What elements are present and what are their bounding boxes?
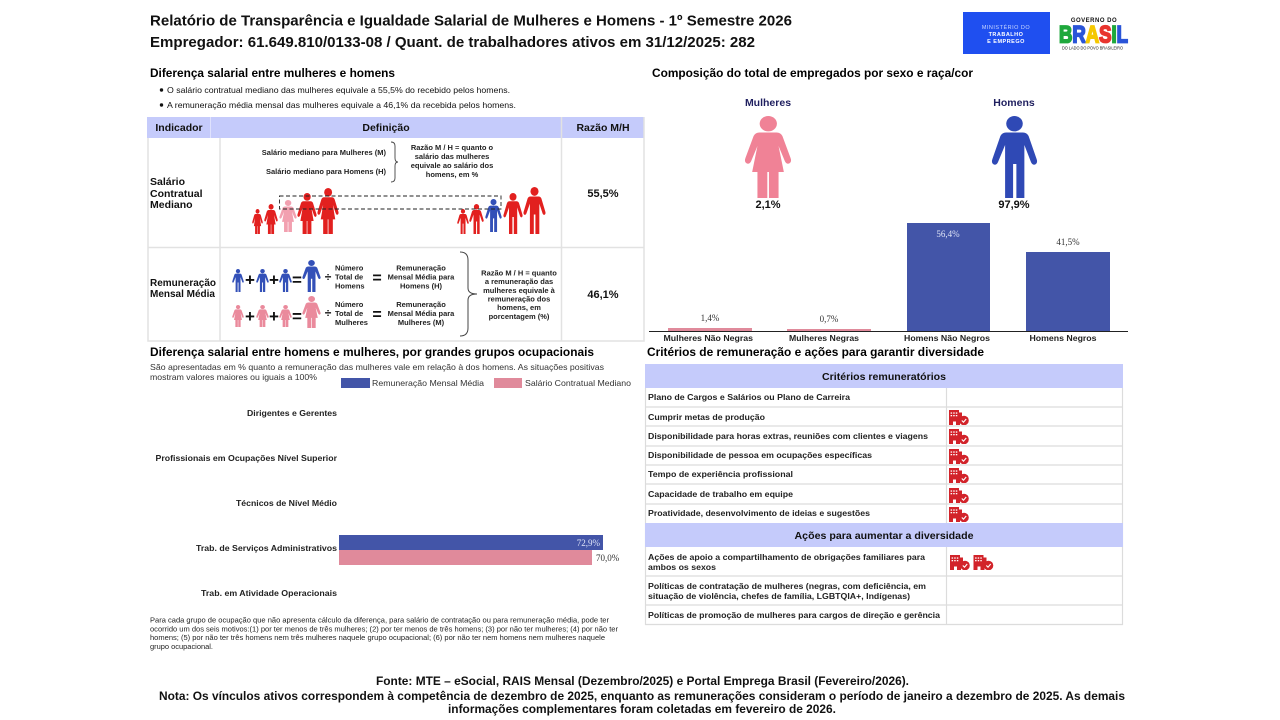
bar chart: sexo e raça/cor: Homens Negros (1030, 333, 1097, 343)
bar chart: sexo e raça/cor: 56,4% (936, 229, 960, 239)
bar chart: sexo e raça/cor: Homens Não Negros (904, 333, 990, 343)
table header: Indicador (155, 122, 203, 134)
definition text: remuneração média: a remuneração das (485, 277, 553, 286)
header: critérios remuneratórios: Critérios remuneratórios (822, 371, 946, 383)
bar chart: grupos ocupacionais: Profissionais em Ocupações Nível Superior (156, 453, 338, 463)
formula: women: = (372, 306, 382, 324)
bar chart: grupos ocupacionais: 72,9% (577, 538, 600, 548)
formula: women: Total de (335, 309, 363, 318)
chart description: mostram valores maiores ou iguais a 100% (150, 372, 317, 382)
bar chart: sexo e raça/cor: 1,4% (701, 313, 720, 323)
formula: women (232, 296, 455, 328)
figure: homens 97,9%: 97,9% (998, 199, 1030, 211)
formula: women: Mulheres (335, 318, 368, 327)
formula: women: Remuneração (396, 300, 446, 309)
formula: women: Mulheres (M) (398, 318, 445, 327)
formula: men: + (269, 270, 279, 290)
criteria rows (648, 393, 929, 518)
row label: Salário Contratual Mediano: Salário (150, 176, 185, 188)
formula: women: ÷ (325, 306, 332, 320)
panel: indicator table (147, 117, 644, 341)
figure: mulheres 2,1%: 2,1% (755, 199, 781, 211)
bar chart: sexo e raça/cor: 0,7% (820, 314, 839, 324)
action rows (648, 553, 941, 620)
bar chart: sexo e raça/cor: Mulheres Negras (789, 333, 859, 343)
row label: Remuneração Mensal Média: Remuneração (150, 277, 216, 289)
formula: women: Mensal Média para (388, 309, 455, 318)
formula: women: + (269, 307, 279, 326)
bar chart: grupos ocupacionais: 70,0% (596, 553, 620, 563)
table header: Razão M/H (576, 122, 630, 134)
action rows: Ações de apoio a compartilhamento de obrigações familiares para (648, 553, 926, 562)
header: ações para aumentar a diversidade (645, 523, 1123, 547)
page title: Empregador: 61.649.810/0133-08 / Quant. de trabalhadores ativos em 31/12/2025: 282 (150, 34, 755, 51)
row label: Salário Contratual Mediano: Mediano (150, 199, 193, 211)
definition text: salário mediano: salário das mulheres (415, 152, 489, 161)
formula: men: + (245, 270, 255, 290)
formula: men: Homens (335, 282, 365, 290)
definition text: salário mediano (262, 142, 494, 182)
page title: Relatório de Transparência e Igualdade Salarial de Mulheres e Homens - 1º Semestre 2026 (150, 12, 792, 30)
definition text: remuneração média: Razão M / H = quanto (481, 268, 557, 278)
row label: Salário Contratual Mediano: Contratual (150, 188, 203, 200)
bar chart: grupos ocupacionais (156, 408, 620, 598)
footer: source and note: Nota: Os vínculos ativos correspondem à competência de dezembro de 2025, enquanto as remunerações consideram o período de janeiro a dezembro de 2025. As demais (159, 691, 1125, 703)
formula: women: Número (335, 300, 364, 309)
header: ações para aumentar a diversidade: Ações para aumentar a diversidade (794, 530, 974, 542)
criteria rows: Tempo de experiência profissional (648, 470, 793, 479)
summary bullets (160, 85, 516, 110)
value: 55,5%: 55,5% (587, 188, 619, 200)
formula: men: = (292, 270, 302, 290)
heading: composição: Composição do total de empregados por sexo e raça/cor (652, 66, 973, 80)
definition text: remuneração média: mulheres equivale à (483, 286, 556, 295)
criteria rows: Cumprir metas de produção (648, 413, 765, 422)
footnote: homens; (5) por não ter três homens nem três mulheres naquele grupo ocupacional; (6) por não ter nem homens nem mulheres naquele (150, 635, 605, 642)
table header: Definição (362, 122, 410, 134)
bar chart: grupos ocupacionais: Trab. em Atividade Operacionais (201, 588, 337, 598)
definition text: remuneração média (460, 252, 557, 336)
chart description: São apresentadas em % quanto a remuneração das mulheres vale em relação à dos homens. As situações positivas (150, 362, 604, 372)
action rows: situação de violência, chefes de família, LGBTQIA+, Indígenas) (648, 592, 910, 601)
formula: men: Mensal Média para (388, 272, 455, 282)
bar chart: sexo e raça/cor: Mulheres Não Negras (664, 333, 753, 343)
panel: criteria table (645, 364, 1123, 624)
logo: Ministério do Trabalho e Emprego: TRABALHO (989, 32, 1024, 38)
definition text: salário mediano: homens, em % (426, 170, 479, 179)
definition text: remuneração média: homens, em (497, 303, 541, 312)
formula: men: Total de (335, 272, 363, 282)
chart legend: Salário Contratual Mediano (525, 378, 631, 388)
definition text: salário mediano: Salário mediano para Homens (H) (266, 167, 387, 176)
bar chart: grupos ocupacionais: Trab. de Serviços Administrativos (196, 543, 337, 553)
action rows: Políticas de promoção de mulheres para cargos de direção e gerência (648, 611, 941, 620)
action rows: Políticas de contratação de mulheres (negras, com deficiência, em (648, 582, 926, 591)
summary bullets: O salário contratual mediano das mulheres equivale a 55,5% do recebido pelos homens. (167, 85, 510, 95)
formula: men (232, 260, 455, 292)
logo: Governo do Brasil: DO LADO DO POVO BRASILEIRO (1062, 46, 1123, 50)
icons: criteria checked (949, 410, 969, 522)
logo: Ministério do Trabalho e Emprego: MINISTÉRIO DO (982, 24, 1030, 31)
definition text: salário mediano: equivale ao salário dos (411, 161, 493, 170)
logo: Ministério do Trabalho e Emprego (963, 12, 1050, 54)
formula: women: = (292, 307, 302, 326)
header: critérios remuneratórios (645, 364, 1123, 388)
formula: women: + (245, 307, 255, 326)
row label: Remuneração Mensal Média: Mensal Média (150, 288, 215, 300)
criteria rows: Disponibilidade de pessoa em ocupações específicas (648, 451, 873, 460)
formula: men: Remuneração (396, 264, 446, 272)
footnote: grupo ocupacional. (150, 644, 213, 651)
heading: diferença salarial: Diferença salarial entre mulheres e homens (150, 66, 395, 80)
bar chart: grupos ocupacionais: Dirigentes e Gerentes (247, 408, 337, 418)
illustration: median women (252, 188, 339, 234)
figure: homens 97,9% (992, 97, 1037, 211)
footnote: ocorrido um dos seis motivos:(1) por ter menos de três mulheres; (2) por ter menos de três homens; (3) por não ter mulheres; (4) por não ter (150, 626, 619, 634)
criteria rows: Disponibilidade para horas extras, reuniões com clientes e viagens (648, 432, 929, 441)
definition text: salário mediano: Salário mediano para Mulheres (M) (262, 148, 386, 157)
figure: homens 97,9%: Homens (993, 97, 1035, 109)
criteria rows: Proatividade, desenvolvimento de ideias e sugestões (648, 509, 871, 518)
formula: men: = (372, 270, 382, 287)
page title (150, 12, 792, 51)
figure: mulheres 2,1% (745, 97, 791, 211)
row label: Remuneração Mensal Média (150, 277, 216, 300)
illustration: median men (457, 187, 546, 234)
chart legend (341, 378, 631, 388)
criteria rows: Capacidade de trabalho em equipe (648, 490, 794, 499)
logo: Governo do Brasil: GOVERNO DO (1071, 18, 1117, 24)
logo: Governo do Brasil (1050, 12, 1136, 54)
action rows: ambos os sexos (648, 563, 717, 572)
table header (147, 117, 644, 138)
summary bullets: A remuneração média mensal das mulheres equivale a 46,1% da recebida pelos homens. (167, 100, 516, 110)
formula: men: ÷ (325, 270, 332, 284)
formula: men: Homens (H) (400, 282, 443, 290)
bar chart: grupos ocupacionais: Técnicos de Nível Médio (236, 498, 337, 508)
row label: Salário Contratual Mediano (150, 176, 203, 211)
logo: Ministério do Trabalho e Emprego: E EMPREGO (987, 39, 1025, 45)
bar chart: sexo e raça/cor: 41,5% (1056, 237, 1080, 247)
footnote (150, 618, 619, 651)
definition text: remuneração média: remuneração dos (488, 294, 550, 304)
formula: men: Número (335, 264, 364, 272)
bar chart: sexo e raça/cor (649, 223, 1128, 343)
definition text: remuneração média: porcentagem (%) (489, 312, 550, 321)
footnote: Para cada grupo de ocupação que não apresenta cálculo da diferença, para salário de contratação ou para remuneração média, pode ter (150, 618, 610, 624)
chart description (150, 362, 604, 382)
heading: critérios: Critérios de remuneração e ações para garantir diversidade (647, 345, 984, 359)
footer: source and note (159, 676, 1125, 716)
footer: source and note: Fonte: MTE – eSocial, RAIS Mensal (Dezembro/2025) e Portal Emprega Brasil (Fevereiro/2026). (376, 676, 909, 688)
chart legend: Remuneração Mensal Média (372, 378, 484, 388)
footer: source and note: informações complementares foram coletadas em fevereiro de 2026. (448, 704, 836, 716)
icons: actions checked (950, 555, 993, 570)
criteria rows: Plano de Cargos e Salários ou Plano de Carreira (648, 393, 851, 402)
logo: Governo do Brasil: BRASIL (1059, 22, 1128, 48)
figure: mulheres 2,1%: Mulheres (745, 97, 791, 109)
definition text: salário mediano: Razão M / H = quanto o (411, 143, 494, 152)
heading: grupos ocupacionais: Diferença salarial entre homens e mulheres, por grandes grupos ocupacionais (150, 345, 594, 359)
value: 46,1%: 46,1% (587, 289, 619, 301)
